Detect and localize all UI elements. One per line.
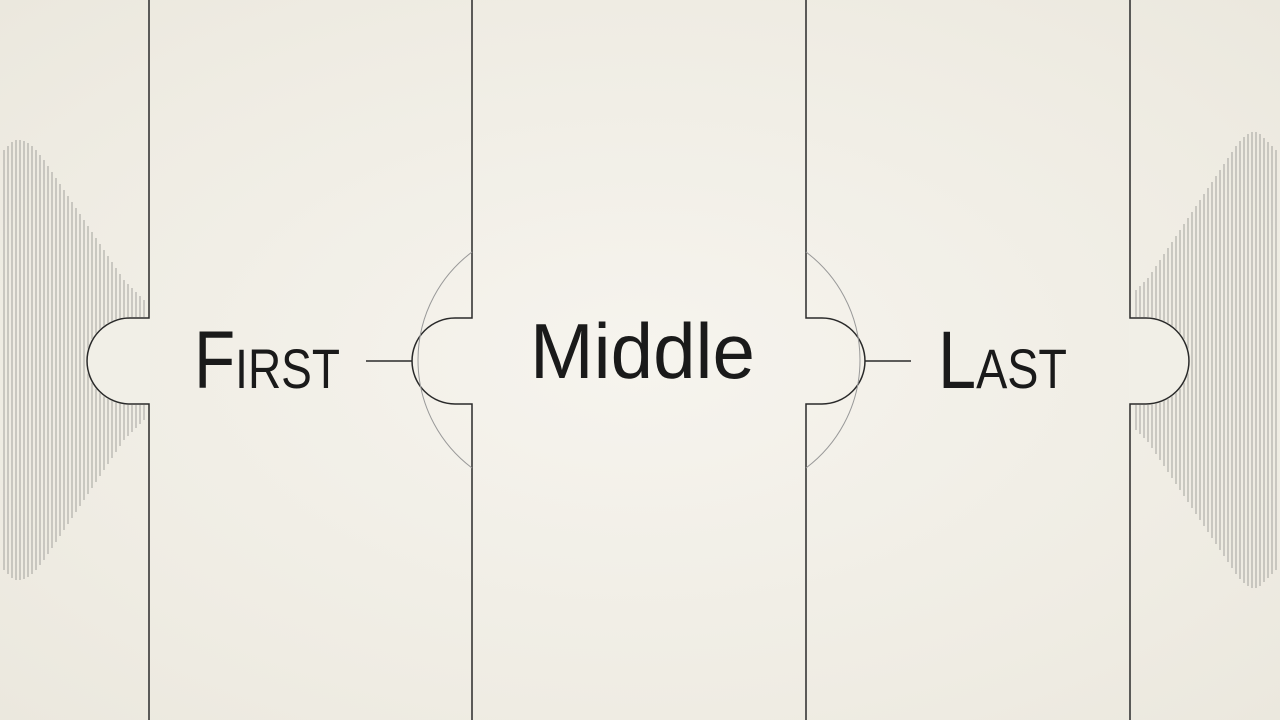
stripes: left bbox=[4, 140, 144, 580]
connector: middle to last bbox=[865, 360, 911, 362]
stripes: right bbox=[1136, 132, 1276, 588]
divider line 4 with tab bbox=[1130, 0, 1189, 720]
connector: first to middle bbox=[366, 360, 412, 362]
arc: right guide bbox=[806, 252, 860, 468]
divider line 1 with left tab bbox=[87, 0, 149, 720]
tab fill shapes bbox=[86, 317, 1190, 405]
arc: left guide bbox=[418, 252, 472, 468]
divider line 2 with tab bbox=[412, 0, 472, 720]
label: First: FIRST bbox=[194, 315, 340, 406]
label: Last: LAST bbox=[938, 315, 1067, 406]
divider line 3 with tab bbox=[806, 0, 865, 720]
label: Middle: Middle bbox=[530, 307, 755, 395]
